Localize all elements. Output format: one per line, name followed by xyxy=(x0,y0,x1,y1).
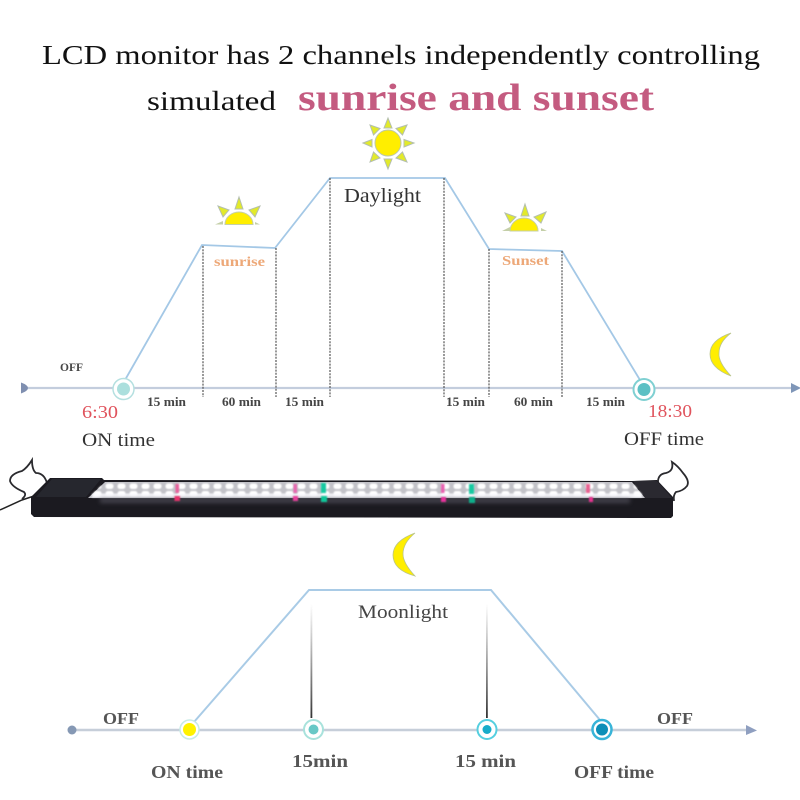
label: OFF time: OFF time xyxy=(624,429,704,450)
label: 15 min: 15 min xyxy=(455,751,516,771)
moonlight schedule chart xyxy=(68,533,757,782)
aquarium LED light fixture xyxy=(0,460,688,518)
LED glow on body xyxy=(100,498,630,503)
15 min marker one xyxy=(304,720,323,739)
duration labels xyxy=(147,395,625,409)
label: OFF left: OFF xyxy=(103,709,139,728)
duration labels: 15 min xyxy=(446,395,485,409)
timeline axis xyxy=(68,725,757,735)
label: ON time: ON time xyxy=(82,430,155,451)
LED dots xyxy=(88,482,645,498)
icon: setting sun xyxy=(502,204,547,231)
fixture body xyxy=(31,478,673,518)
icon: crescent moon xyxy=(393,533,415,576)
duration labels: 15 min xyxy=(147,395,186,409)
label: OFF right: OFF xyxy=(657,709,693,728)
coloured LEDs xyxy=(174,483,593,503)
duration labels: 15 min xyxy=(285,395,324,409)
light intensity curve xyxy=(125,178,640,380)
title xyxy=(42,40,760,119)
ON time marker xyxy=(113,378,134,400)
label: 15min: 15min xyxy=(292,751,348,771)
daylight schedule chart xyxy=(21,118,800,451)
dashed time dividers xyxy=(203,178,562,397)
OFF time marker xyxy=(592,720,612,739)
label: Daylight: Daylight xyxy=(344,185,421,207)
end caps xyxy=(36,479,101,497)
duration labels: 60 min xyxy=(514,395,553,409)
label: OFF left: OFF xyxy=(60,360,83,374)
title: sunrise and sunset xyxy=(298,77,654,119)
label: sunrise: sunrise xyxy=(214,254,265,269)
icon: full sun xyxy=(363,118,414,169)
left bracket xyxy=(10,460,47,499)
label: Sunset: Sunset xyxy=(502,254,549,269)
start time: 6:30 xyxy=(82,402,118,422)
power cable xyxy=(0,496,34,510)
label: OFF time: OFF time xyxy=(574,762,654,782)
15 min marker two xyxy=(478,720,496,739)
LED panel xyxy=(88,482,645,498)
right bracket xyxy=(658,462,688,501)
duration labels: 15 min xyxy=(586,395,625,409)
timeline axis xyxy=(21,382,800,394)
icon: rising sun xyxy=(215,197,260,224)
label: ON time: ON time xyxy=(151,762,223,782)
end time: 18:30 xyxy=(648,401,692,421)
ON time marker xyxy=(180,720,199,739)
title: simulated xyxy=(147,86,277,116)
OFF time marker xyxy=(634,379,654,400)
icon: crescent moon xyxy=(710,333,731,376)
title: LCD monitor has 2 channels independently controlling xyxy=(42,40,760,70)
time dividers xyxy=(310,604,488,718)
label: Moonlight: Moonlight xyxy=(358,602,449,623)
duration labels: 60 min xyxy=(222,395,261,409)
light intensity curve xyxy=(194,590,600,722)
